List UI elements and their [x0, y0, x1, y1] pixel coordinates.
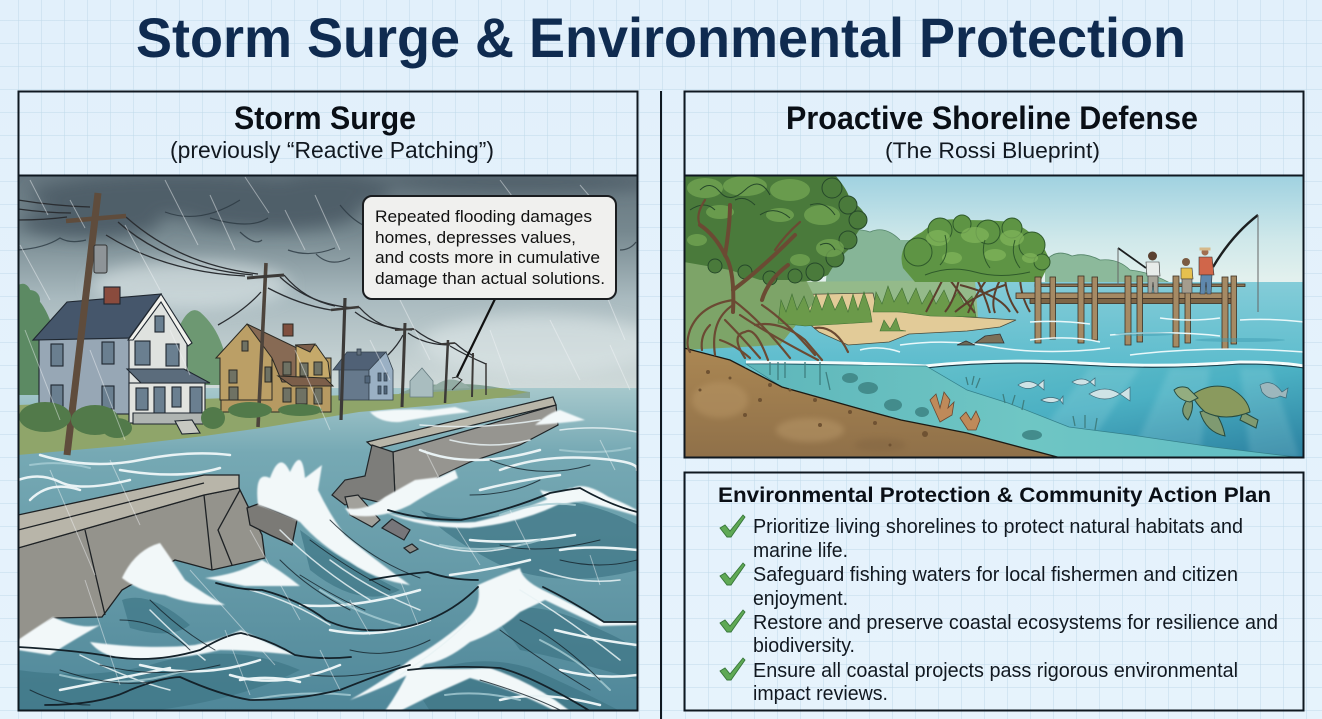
action item 2: [720, 563, 1238, 610]
dock: [1016, 276, 1245, 349]
mid mangrove cluster: [902, 215, 1050, 313]
illustration: storm surge scene: [12, 172, 660, 711]
action plan box: [684, 472, 1304, 710]
sunlight rays: [1050, 368, 1300, 456]
water ripples: [860, 318, 1304, 355]
heading box: storm surge: (previously “Reactive Patching”): [170, 137, 494, 163]
heading box: storm surge: [18, 92, 638, 176]
underwater: [746, 359, 1304, 458]
foam splashes: [18, 407, 637, 711]
clear sky: [808, 176, 1302, 282]
callout: homes, depresses values,: [375, 228, 576, 247]
heading box: proactive shoreline defense: Proactive Shoreline Defense: [786, 100, 1198, 136]
panel: proactive shoreline defense: [684, 92, 1304, 710]
house 3: [333, 349, 393, 400]
distant tree line: [826, 229, 1169, 282]
foam streaks: [18, 420, 637, 705]
action item 1: marine life.: [753, 539, 848, 562]
illustration frame: [684, 176, 1304, 458]
illustration: living shoreline scene: [684, 175, 1304, 458]
brown soil bank: [684, 348, 1061, 458]
title: Storm Surge & Environmental Protection: [136, 6, 1186, 69]
sea turtle: [1174, 386, 1258, 436]
rain: [20, 177, 630, 695]
action item 1: Prioritize living shorelines to protect natural habitats and: [753, 515, 1243, 538]
callout: Repeated flooding damages: [375, 207, 592, 226]
action item 1: [720, 515, 1243, 562]
action item 4: [720, 658, 1238, 705]
sea surface: [18, 388, 638, 711]
action item 4: impact reviews.: [753, 682, 888, 705]
upper water: [684, 282, 1304, 367]
people fishing: [1118, 215, 1258, 312]
action item 2: Safeguard fishing waters for local fishermen and citizen: [753, 563, 1238, 586]
action item 3: Restore and preserve coastal ecosystems for resilience and: [753, 611, 1278, 634]
stormy sky: [20, 176, 636, 388]
action item 2: enjoyment.: [753, 587, 848, 610]
near seawall: [18, 475, 297, 645]
action plan heading: Environmental Protection & Community Action Plan: [718, 483, 1271, 507]
far seawall: [332, 397, 558, 553]
waves: dark swells: [18, 500, 638, 711]
utility poles and wires: [18, 193, 486, 455]
mangrove trunk and roots: [688, 200, 848, 360]
mangrove foliage: [684, 175, 867, 285]
panel: storm surge: [12, 92, 660, 711]
pale grass behind mangrove: [686, 262, 814, 350]
fish: [1018, 378, 1288, 404]
water line: [746, 361, 1304, 366]
rock: [957, 334, 1004, 345]
house 4: [410, 368, 433, 397]
house 2: [216, 324, 333, 412]
seabed slope: [746, 364, 1304, 458]
callout: damage than actual solutions.: [375, 269, 605, 288]
house 1: [33, 287, 210, 434]
shrubs: [19, 402, 322, 438]
sandy beach: [809, 292, 1016, 346]
illustration frame: [18, 176, 638, 710]
heading box: storm surge: Storm Surge: [234, 100, 416, 136]
heading box: proactive shoreline defense: (The Rossi Blueprint): [885, 138, 1100, 163]
callout: [363, 196, 616, 390]
grasses: [778, 286, 976, 331]
sea life plants: [770, 362, 1097, 440]
action item 4: Ensure all coastal projects pass rigorous environmental: [753, 659, 1238, 682]
action item 3: biodiversity.: [753, 634, 855, 657]
mid ground strip behind beach: [806, 280, 978, 318]
wave ink lines: [18, 460, 637, 711]
center divider: [660, 91, 662, 719]
heading box: proactive shoreline defense: [684, 92, 1304, 176]
soil texture and pebbles: [692, 370, 928, 452]
callout: and costs more in cumulative: [375, 248, 600, 267]
grassy shoreline: [18, 388, 528, 455]
background trees: [12, 284, 530, 398]
action item 3: [720, 610, 1278, 657]
